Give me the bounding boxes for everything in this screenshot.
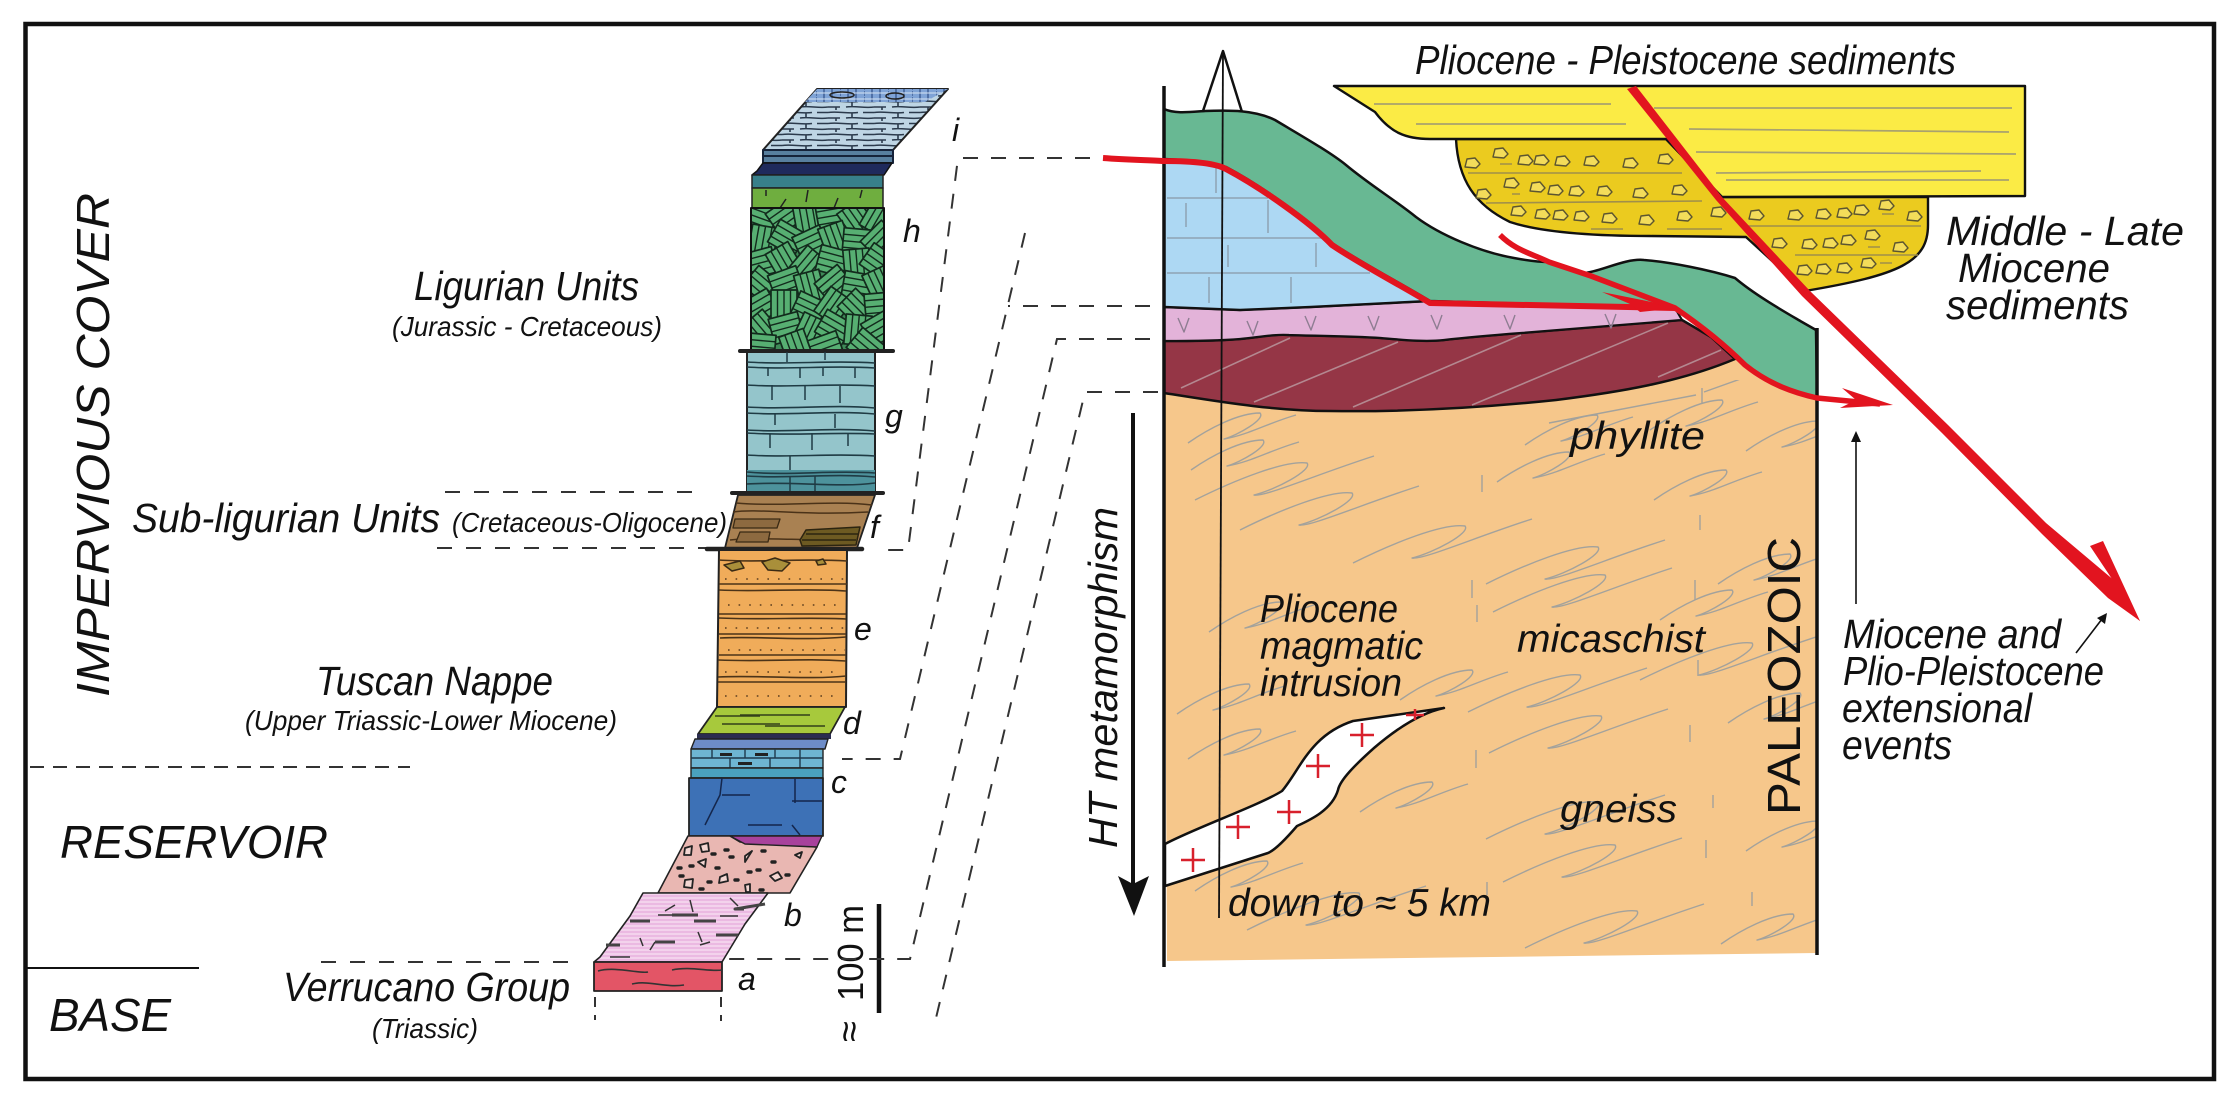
label: Pliocene magmatic intrusion bbox=[1260, 588, 1423, 705]
unit g: teal limestone bbox=[747, 352, 875, 493]
layer: blue limestone bbox=[1164, 159, 1430, 310]
well derrick bbox=[1203, 51, 1242, 112]
correlation lines bbox=[723, 158, 1158, 1018]
fault: lower detachment bbox=[1500, 235, 1893, 408]
zone divider: reservoir and base bbox=[27, 967, 199, 969]
column letters bbox=[738, 112, 960, 997]
label: Tuscan Nappe bbox=[245, 658, 617, 736]
label: borehole depth: down to ≈ 5 km bbox=[1228, 882, 1491, 925]
depth arrow: HT metamorphism bbox=[1080, 413, 1149, 916]
unit b: conglomerate and pink slate bbox=[594, 836, 822, 962]
label: Sub-ligurian Units: (Cretaceous-Oligocene) bbox=[452, 507, 727, 538]
heading: impervious cover: IMPERVIOUS COVER bbox=[67, 193, 119, 697]
contact line bbox=[732, 491, 883, 495]
label: Middle-Late Miocene sediments: Miocene bbox=[1958, 245, 2110, 291]
arrow: to main fault bbox=[2076, 613, 2107, 653]
sediments: Pliocene-Pleistocene bbox=[1334, 86, 2025, 197]
walls bbox=[1164, 86, 1817, 967]
column letters: i bbox=[952, 112, 960, 148]
label: Pliocene-Pleistocene sediments: Pliocene - Pleistocene sediments bbox=[1415, 37, 1956, 83]
unit i: top limestone bbox=[752, 89, 948, 175]
column letters: f bbox=[870, 509, 882, 545]
intrusion bbox=[1165, 708, 1444, 886]
layer: ligurian green bbox=[1164, 109, 1817, 397]
label: Tuscan Nappe: Tuscan Nappe bbox=[316, 658, 553, 704]
foliation bbox=[1177, 372, 1854, 948]
label: Ligurian Units: Ligurian Units bbox=[414, 263, 639, 309]
label: Verrucano Group bbox=[283, 964, 570, 1044]
unit e: sandstone bbox=[717, 550, 847, 707]
unit a: red basement bbox=[594, 962, 722, 991]
zone divider: cover and reservoir bbox=[30, 766, 410, 768]
label: Pliocene magmatic intrusion: Pliocene bbox=[1260, 588, 1398, 631]
break symbol: ≈ bbox=[829, 1021, 871, 1042]
label: Tuscan Nappe: (Upper Triassic-Lower Miocene) bbox=[245, 705, 617, 736]
arrow: to lower detachment bbox=[1851, 431, 1861, 604]
heading: base: BASE bbox=[49, 989, 172, 1041]
heading: reservoir: RESERVOIR bbox=[60, 816, 328, 868]
column letters: h bbox=[903, 213, 921, 249]
column letters: b bbox=[784, 897, 802, 933]
label: Middle-Late Miocene sediments bbox=[1946, 208, 2184, 328]
layer: pink evaporite bbox=[1164, 301, 1682, 341]
column letters: e bbox=[854, 611, 872, 647]
label: extensional events bbox=[1842, 611, 2104, 768]
layer: paleozoic basement bbox=[1164, 359, 1854, 961]
panel: geological section bbox=[1103, 51, 2140, 967]
label: Verrucano Group: Verrucano Group bbox=[283, 964, 570, 1010]
label: phyllite: phyllite bbox=[1569, 415, 1705, 458]
contact line bbox=[740, 349, 893, 353]
label: gneiss: gneiss bbox=[1560, 788, 1677, 831]
label: Middle-Late Miocene sediments: Middle - Late bbox=[1946, 208, 2184, 254]
column letters: d bbox=[843, 705, 862, 741]
label: Ligurian Units bbox=[392, 263, 662, 342]
label: Verrucano Group: (Triassic) bbox=[372, 1013, 478, 1044]
unit d: green marl bbox=[698, 707, 845, 734]
label: extensional events: Miocene and bbox=[1843, 611, 2062, 657]
column letters: a bbox=[738, 961, 756, 997]
column letters: g bbox=[885, 398, 903, 434]
label: Sub-ligurian Units bbox=[132, 495, 727, 541]
sediments: Middle-Late Miocene bbox=[1456, 139, 1928, 291]
fault: upper thrust bbox=[1103, 158, 1680, 312]
scale bar: 100 m: 100 m bbox=[830, 905, 871, 1001]
borehole bbox=[1219, 51, 1223, 918]
label: micaschist: micaschist bbox=[1517, 618, 1707, 661]
stratigraphic column bbox=[594, 89, 948, 1042]
label: Ligurian Units: (Jurassic - Cretaceous) bbox=[392, 311, 662, 342]
label: extensional events: events bbox=[1842, 722, 1952, 768]
contact line bbox=[707, 547, 862, 551]
unit f: brown shale bbox=[725, 495, 875, 548]
label: Pliocene magmatic intrusion: intrusion bbox=[1260, 662, 1402, 705]
label: Paleozoic: PALEOZOIC bbox=[1758, 537, 1810, 815]
depth arrow: HT metamorphism: HT metamorphism bbox=[1080, 507, 1126, 848]
unit h: green tiled layer bbox=[750, 174, 885, 349]
layer: maroon unit bbox=[1164, 320, 1735, 411]
column letters: c bbox=[831, 764, 847, 800]
label: extensional events: extensional bbox=[1842, 685, 2034, 731]
fault: main extensional bbox=[1627, 86, 2140, 621]
label: extensional events: Plio-Pleistocene bbox=[1843, 648, 2104, 694]
label: Pliocene magmatic intrusion: magmatic bbox=[1260, 625, 1423, 668]
unit c: limestone stack bbox=[689, 734, 831, 836]
label: Middle-Late Miocene sediments: sediments bbox=[1946, 282, 2129, 328]
label: Sub-ligurian Units: Sub-ligurian Units bbox=[132, 495, 440, 541]
